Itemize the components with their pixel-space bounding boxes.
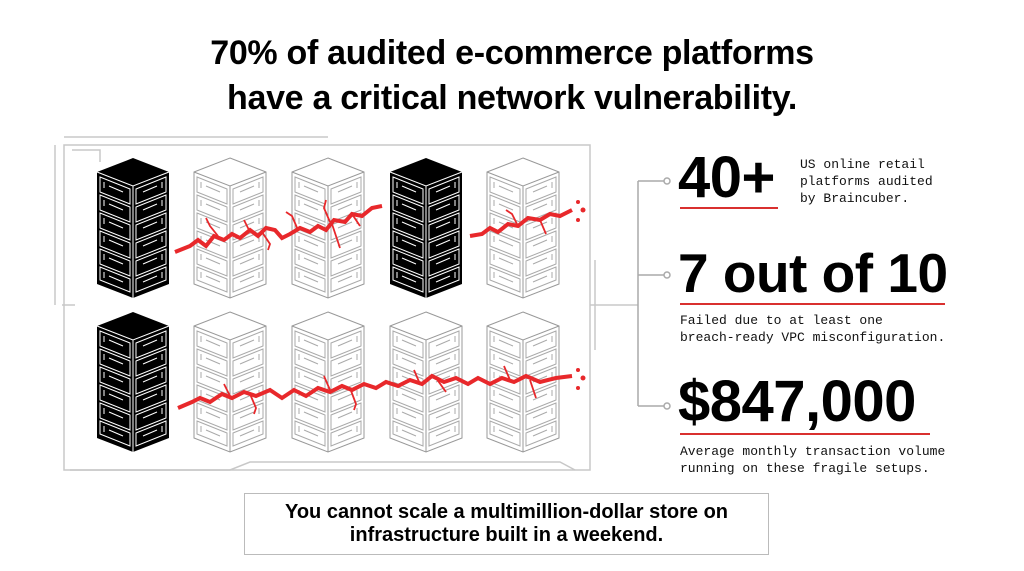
- text: breach-ready VPC misconfiguration.: [680, 330, 945, 345]
- callout box: infrastructure built in a weekend.: [350, 524, 663, 546]
- servers row 2: [97, 312, 559, 452]
- frame: [55, 137, 638, 470]
- title: have a critical network vulnerability.: [227, 79, 797, 117]
- text: 7 out of 10: [678, 242, 948, 304]
- connector lines: [638, 178, 670, 409]
- text: $847,000: [678, 369, 916, 434]
- text: Failed due to at least one: [680, 313, 883, 328]
- callout box: You cannot scale a multimillion-dollar store on: [285, 501, 728, 523]
- title: [210, 34, 814, 117]
- text: by Braincuber.: [800, 191, 909, 206]
- servers row 1: [97, 158, 559, 298]
- stat: $847,000: [678, 369, 945, 476]
- title: 70% of audited e-commerce platforms: [210, 34, 814, 72]
- stat: 40+: [678, 145, 933, 210]
- text: platforms audited: [800, 174, 933, 189]
- text: Average monthly transaction volume: [680, 444, 945, 459]
- stat: 7 out of 10: [678, 242, 948, 345]
- text: 40+: [678, 145, 775, 210]
- text: US online retail: [800, 157, 925, 172]
- red cracks: [175, 200, 572, 414]
- text: running on these fragile setups.: [680, 461, 930, 476]
- callout box: [244, 493, 769, 555]
